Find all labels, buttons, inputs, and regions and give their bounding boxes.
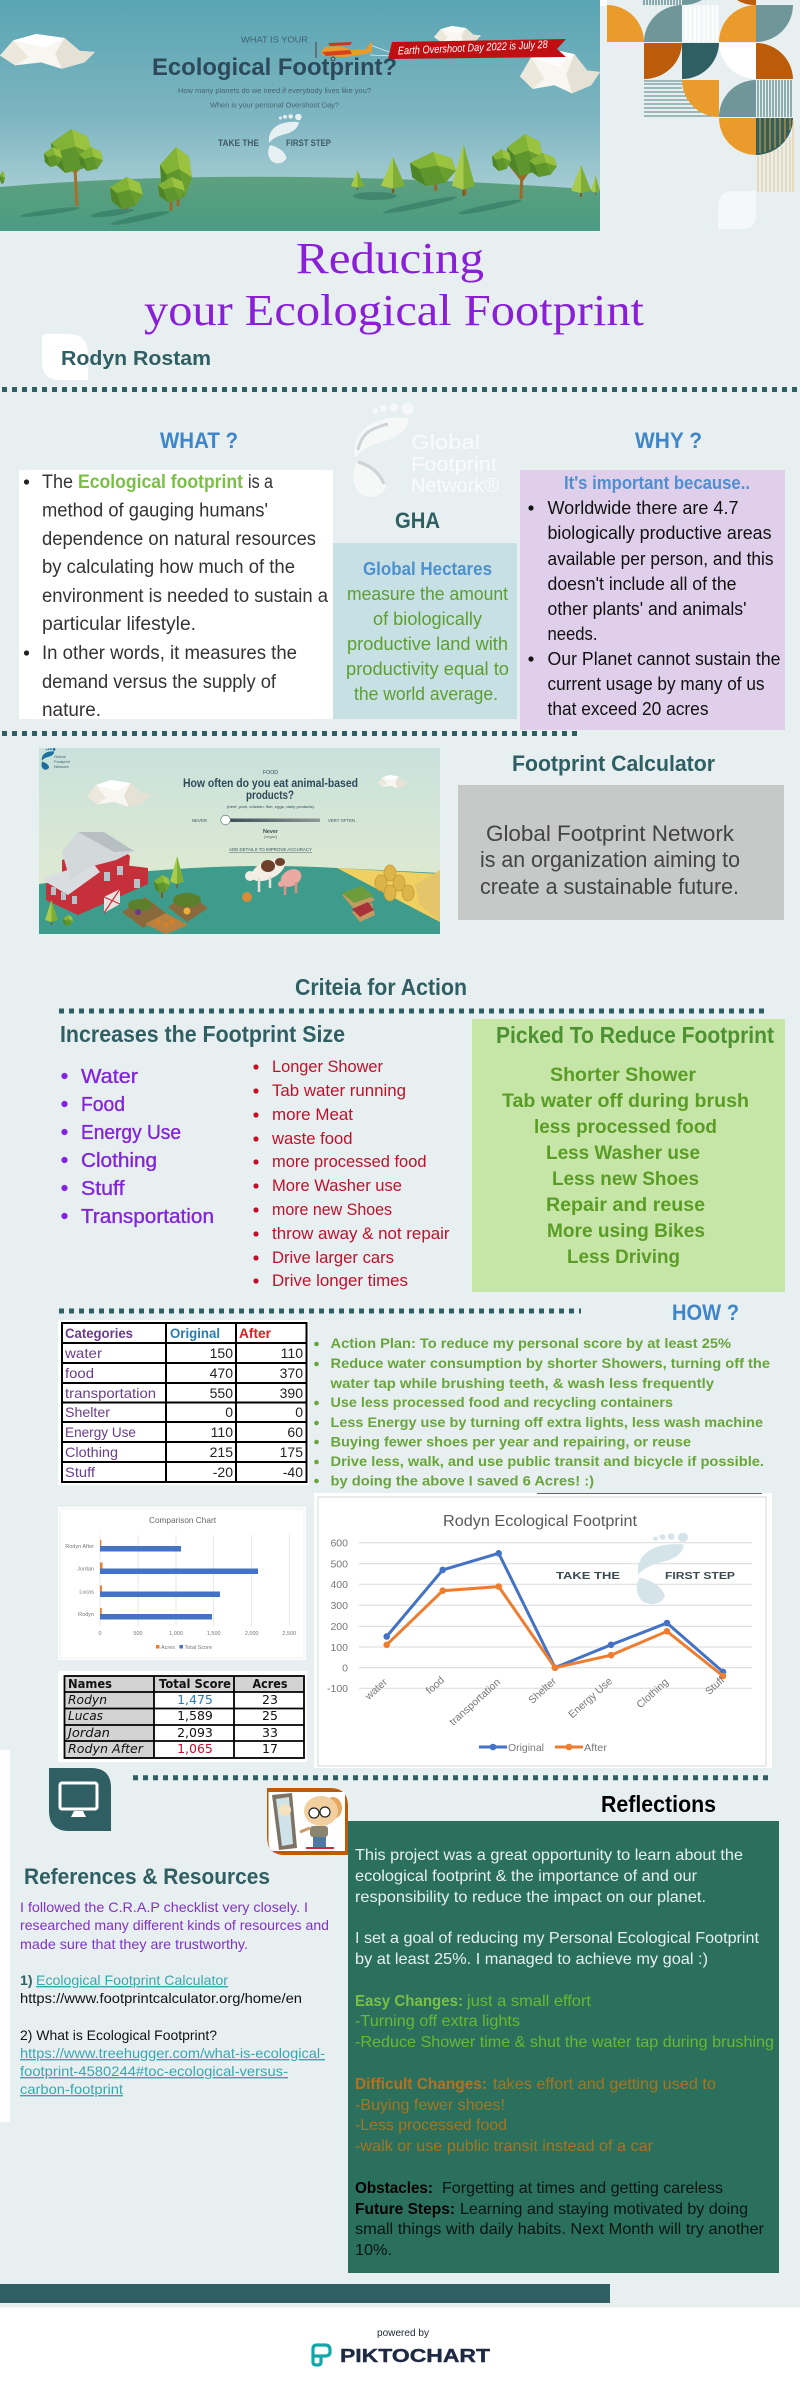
panel: picked to reduce footprint: Less new Shoes: [552, 1168, 699, 1190]
panel: global hectares: [333, 543, 517, 719]
line chart: rodyn ecological footprint: 0: [342, 1662, 348, 1674]
crates: [342, 886, 375, 922]
slider: NEVER: [192, 818, 208, 823]
list: habits increasing the footprint: Drive longer times: [272, 1271, 408, 1290]
calculator screenshot: [39, 748, 440, 934]
bar chart: comparison chart: [58, 1507, 306, 1660]
text block: references: [20, 1899, 329, 2097]
panel: why it matters: doesn't include all of the: [548, 574, 736, 594]
action plan list: [314, 1335, 770, 1488]
reflection summary: This project was a great opportunity to learn about the: [355, 1847, 743, 1864]
title: Reducing: [296, 234, 484, 283]
difficult changes: -Buying fewer shoes!: [355, 2097, 505, 2114]
hero heading text: How many planets do we need if everybody lives like you?: [178, 86, 371, 95]
slider: Never: [263, 829, 278, 835]
obstacles and future steps: [355, 2180, 765, 2259]
panel: picked to reduce footprint: [472, 1019, 785, 1292]
panel: picked to reduce footprint: Less Driving: [567, 1246, 680, 1268]
legend: Acres: [161, 1645, 175, 1651]
panel: picked to reduce footprint: less processed food: [534, 1116, 717, 1138]
panel: global footprint network: is an organization aiming to: [480, 847, 740, 872]
bar chart: comparison chart: 0: [98, 1631, 102, 1637]
panel: global hectares: productivity equal to: [346, 659, 509, 679]
panel: picked to reduce footprint: Tab water off during brush: [502, 1090, 749, 1112]
table: score comparison: 23: [262, 1692, 278, 1707]
action plan list: Use less processed food and recycling containers: [330, 1394, 673, 1410]
table: category scores: Categories: [65, 1325, 133, 1341]
category labels: water: [362, 1676, 390, 1703]
legend: After: [584, 1742, 608, 1754]
panel: why it matters: that exceed 20 acres: [548, 699, 708, 719]
difficult changes: Difficult Changes:: [355, 2076, 487, 2093]
hero heading text: [152, 34, 397, 110]
footer bar: [0, 2284, 610, 2303]
low-poly trees: [0, 129, 600, 227]
table: category scores: Clothing: [65, 1444, 118, 1460]
barn: [43, 832, 148, 915]
text block: references: I followed the C.R.A.P checklist very closely. I: [20, 1899, 308, 1915]
reflection summary: [355, 1847, 760, 1968]
list: footprint categories: Transportation: [81, 1206, 214, 1228]
text block: references: footprint-4580244#toc-ecological-versus-: [20, 2063, 288, 2079]
hill: [0, 177, 600, 231]
heading: what: WHAT ?: [160, 428, 238, 453]
panel: global hectares: of biologically: [373, 609, 482, 629]
table: category scores: 215: [210, 1444, 233, 1460]
line: original: [383, 1550, 726, 1675]
bar chart: comparison chart: Comparison Chart: [149, 1515, 217, 1525]
heading: criteria for action: Criteia for Action: [295, 974, 467, 1000]
list: footprint categories: Clothing: [81, 1150, 157, 1172]
table: category scores: 0: [225, 1404, 233, 1420]
list: habits increasing the footprint: Drive larger cars: [272, 1248, 394, 1267]
table: category scores: Energy Use: [65, 1424, 136, 1440]
list: habits increasing the footprint: more Meat: [272, 1105, 353, 1124]
line chart: rodyn ecological footprint: Rodyn Ecological Footprint: [443, 1513, 638, 1530]
watermark: take the first step: TAKE THE: [556, 1570, 620, 1582]
icon: piktochart logo: [313, 2345, 330, 2365]
table: category scores: Stuff: [65, 1464, 95, 1480]
panel: global hectares: Global Hectares: [363, 559, 492, 579]
action plan list: Drive less, walk, and use public transit and bicycle if possible.: [330, 1453, 764, 1469]
watermark: take the first step: [556, 1533, 735, 1604]
question text: [183, 770, 358, 809]
easy changes: just a small effort: [466, 1993, 592, 2010]
obstacles and future steps: Future Steps:: [355, 2201, 455, 2218]
line chart: rodyn ecological footprint: 600: [330, 1538, 348, 1550]
panel: why it matters: Worldwide there are 4.7: [548, 498, 738, 518]
list: footprint categories: Food: [81, 1094, 125, 1116]
table: score comparison: Acres: [252, 1676, 288, 1691]
slider: VERY OFTEN: [328, 818, 355, 823]
network logo: Network: [54, 764, 69, 769]
heading: footprint calculator: Footprint Calculator: [512, 751, 715, 776]
panel: what definition: dependence on natural resources: [42, 529, 316, 550]
list: habits increasing the footprint: more new Shoes: [272, 1200, 392, 1219]
table: category scores: 0: [295, 1404, 303, 1420]
logo: global footprint network watermark: [353, 403, 499, 497]
table: category scores: 550: [210, 1385, 233, 1401]
panel: why it matters: current usage by many of us: [548, 674, 764, 694]
table: category scores: water: [64, 1345, 102, 1361]
list: footprint categories: Stuff: [81, 1178, 125, 1200]
trees: [45, 856, 184, 926]
table: category scores: Original: [170, 1325, 220, 1341]
panel: picked to reduce footprint: Shorter Shower: [550, 1064, 696, 1086]
bar chart: comparison chart: 2,500: [282, 1631, 296, 1637]
piktochart branding: PIKTOCHART: [340, 2345, 491, 2366]
bar chart: comparison chart: Jordan: [77, 1566, 94, 1572]
bar chart: comparison chart: 2,000: [245, 1631, 259, 1637]
legend: Total Score: [184, 1645, 212, 1651]
line chart: rodyn ecological footprint: -100: [327, 1683, 348, 1695]
list: habits increasing the footprint: Longer Shower: [272, 1057, 383, 1076]
panel: why it matters: other plants' and animals': [548, 599, 746, 619]
panel: what definition: particular lifestyle.: [42, 614, 196, 635]
legend: Original: [508, 1742, 544, 1754]
panel: reflections: [348, 1821, 779, 2273]
table: score comparison: Names: [68, 1676, 112, 1691]
heading: references and resources: References & Resources: [24, 1864, 270, 1889]
text block: references: made sure that they are trustworthy.: [20, 1936, 248, 1952]
table: category scores: 150: [210, 1345, 233, 1361]
category labels: [362, 1674, 727, 1728]
farm animals: [242, 854, 305, 902]
question text: products?: [246, 788, 294, 802]
bar chart: comparison chart: 1,000: [169, 1631, 183, 1637]
author name: [42, 334, 211, 380]
take the first step logo: TAKE THE: [218, 138, 259, 149]
table: score comparison: Rodyn: [68, 1692, 107, 1707]
legend: [156, 1645, 212, 1651]
table: category scores: transportation: [65, 1385, 156, 1401]
question text: (beef, pork, chicken, fish, eggs, dairy products): [227, 804, 315, 809]
category labels: transportation: [447, 1676, 503, 1728]
panel: global footprint network: create a sustainable future.: [480, 874, 739, 899]
plane and tow banner: Earth Overshoot Day 2022 is July 28: [398, 39, 549, 57]
network logo: [41, 748, 71, 770]
hero banner image: [0, 0, 600, 231]
panel: picked to reduce footprint: Less Washer use: [546, 1142, 700, 1164]
table: score comparison: Jordan: [65, 1725, 110, 1740]
panel: global footprint network: Global Footprint Network: [486, 821, 735, 846]
table: score comparison: Rodyn After: [68, 1741, 144, 1756]
clouds: [87, 775, 408, 807]
heading: why: WHY ?: [635, 428, 702, 453]
table: category scores: 175: [280, 1444, 303, 1460]
panel: why it matters: [520, 470, 785, 730]
piktochart branding: [313, 2327, 491, 2366]
list: footprint categories: Energy Use: [81, 1122, 181, 1144]
panel: what definition: Ecological footprint: [78, 472, 244, 493]
title: [144, 234, 644, 335]
table: score comparison: Total Score: [159, 1676, 231, 1691]
hero heading text: WHAT IS YOUR: [241, 34, 308, 44]
reflection summary: by at least 25%. I managed to achieve my goal :): [355, 1951, 708, 1968]
panel: picked to reduce footprint: More using Bikes: [547, 1220, 705, 1242]
table: score comparison: 2,093: [177, 1725, 213, 1740]
list: habits increasing the footprint: More Washer use: [272, 1176, 402, 1195]
obstacles and future steps: Forgetting at times and getting careless: [442, 2180, 723, 2197]
panel: what definition: In other words, it measures the: [42, 643, 297, 664]
icon: mirror cartoon: [267, 1788, 348, 1855]
table: score comparison: 1,475: [177, 1692, 213, 1707]
table: category scores: -40: [283, 1464, 303, 1480]
difficult changes: -Less processed food: [355, 2117, 507, 2134]
hay bales: [375, 865, 414, 901]
bar chart: comparison chart: 500: [133, 1631, 143, 1637]
line: after: [383, 1583, 726, 1679]
table: category scores: 470: [210, 1365, 233, 1381]
table: score comparison: 25: [262, 1708, 278, 1723]
network logo: Footprint: [54, 759, 71, 764]
panel: why it matters: biologically productive areas: [548, 523, 772, 543]
table: category scores: 110: [211, 1424, 233, 1440]
reflection summary: responsibility to reduce the impact on our planet.: [355, 1889, 706, 1906]
category labels: Energy Use: [566, 1675, 615, 1721]
obstacles and future steps: Learning and staying motivated by doing: [460, 2201, 748, 2218]
difficult changes: [355, 2076, 716, 2155]
vegetable beds: [122, 893, 208, 934]
logo: global footprint network watermark: Footprint: [411, 454, 497, 476]
bar chart: comparison chart: 1,500: [207, 1631, 221, 1637]
action plan list: Less Energy use by turning off extra lights, less wash machine: [330, 1414, 763, 1430]
table: category scores: After: [239, 1325, 272, 1341]
panel: global hectares: measure the amount: [347, 584, 508, 604]
network logo: Global: [54, 754, 66, 759]
reflection summary: ecological footprint & the importance of and our: [355, 1868, 698, 1885]
heading: reflections: Reflections: [601, 1791, 716, 1817]
text block: references: carbon-footprint: [20, 2081, 123, 2097]
panel: what definition: The: [42, 472, 73, 493]
panel: what definition: demand versus the supply of: [42, 672, 277, 693]
table: category scores: [58, 1320, 309, 1485]
watermark: take the first step: FIRST STEP: [665, 1570, 735, 1582]
action plan list: by doing the above I saved 6 Acres! :): [330, 1472, 594, 1488]
text block: references: Ecological Footprint Calculator: [36, 1972, 228, 1988]
panel: why it matters: needs.: [548, 624, 598, 644]
panel: why it matters: Our Planet cannot sustain the: [548, 649, 780, 669]
table: score comparison: 17: [262, 1741, 278, 1756]
bars: [100, 1540, 258, 1620]
text block: references: https://www.footprintcalculator.org/home/en: [20, 1990, 302, 2006]
category labels: Clothing: [634, 1676, 671, 1711]
table: category scores: 370: [280, 1365, 303, 1381]
slider: ADD DETAILS TO IMPROVE ACCURACY: [229, 847, 312, 852]
table: category scores: 110: [281, 1345, 303, 1361]
list: habits increasing the footprint: waste food: [271, 1129, 352, 1148]
heading: how: HOW ?: [672, 1300, 739, 1325]
obstacles and future steps: Obstacles:: [355, 2180, 433, 2197]
action plan list: Action Plan: To reduce my personal score by at least 25%: [330, 1335, 732, 1351]
panel: what definition: method of gauging humans': [42, 501, 268, 522]
panel: why it matters: available per person, and this: [548, 549, 774, 569]
easy changes: Easy Changes:: [355, 1993, 463, 2010]
clouds: [0, 26, 600, 93]
table: category scores: 390: [280, 1385, 303, 1401]
list: footprint categories: Water: [81, 1066, 138, 1088]
line chart: rodyn ecological footprint: 400: [330, 1579, 348, 1591]
logo: global footprint network watermark: Global: [411, 432, 480, 454]
text block: references: 1): [20, 1972, 32, 1988]
bar chart: comparison chart: Rodyn: [78, 1612, 94, 1618]
logo: global footprint network watermark: Network®: [411, 475, 499, 497]
author name: Rodyn Rostam: [61, 348, 211, 370]
line chart: rodyn ecological footprint: 300: [330, 1600, 348, 1612]
table: category scores: 60: [287, 1424, 303, 1440]
legend: [479, 1742, 608, 1754]
reflection summary: I set a goal of reducing my Personal Ecological Footprint: [355, 1930, 760, 1947]
panel: what definition: nature.: [42, 700, 101, 721]
piktochart branding: powered by: [377, 2327, 430, 2339]
slider: [192, 815, 355, 852]
panel: what definition: is a: [248, 472, 273, 493]
list: habits increasing the footprint: Tab water running: [272, 1081, 406, 1100]
text block: references: https://www.treehugger.com/what-is-ecological-: [20, 2045, 325, 2061]
list: footprint categories: [62, 1066, 214, 1228]
slider: (vegan): [264, 834, 278, 839]
panel: what definition: by calculating how much of the: [42, 557, 295, 578]
action plan list: Reduce water consumption by shorter Showers, turning off the: [330, 1355, 770, 1371]
category labels: Stuff: [703, 1674, 727, 1698]
difficult changes: -walk or use public transit instead of a car: [355, 2138, 654, 2155]
bar chart: comparison chart: Rodyn After: [65, 1544, 94, 1550]
hero heading text: Ecological Footprint?: [152, 54, 397, 81]
difficult changes: takes effort and getting used to: [493, 2076, 716, 2093]
panel: picked to reduce footprint: Repair and reuse: [546, 1194, 705, 1216]
heading: increases the footprint size: Increases the Footprint Size: [60, 1021, 345, 1047]
panel: what definition: environment is needed to sustain a: [42, 586, 328, 607]
panel: picked to reduce footprint: Picked To Reduce Footprint: [496, 1022, 774, 1048]
easy changes: [355, 1993, 774, 2051]
panel: global hectares: the world average.: [354, 684, 498, 704]
easy changes: -Turning off extra lights: [355, 2013, 520, 2030]
obstacles and future steps: small things with daily habits. Next Month will try another: [355, 2221, 765, 2238]
table: category scores: Shelter: [65, 1404, 110, 1420]
question text: How often do you eat animal-based: [183, 776, 358, 790]
take the first step logo: [218, 114, 332, 163]
bar chart: comparison chart: Lucas: [79, 1590, 94, 1596]
text block: references: researched many different kinds of resources and: [20, 1917, 329, 1933]
action plan list: water tap while brushing teeth, & wash less frequently: [329, 1375, 714, 1391]
obstacles and future steps: 10%.: [355, 2242, 392, 2259]
easy changes: -Reduce Shower time & shut the water tap during brushing: [355, 2034, 774, 2051]
question text: FOOD: [263, 770, 278, 776]
list: habits increasing the footprint: more processed food: [272, 1152, 426, 1171]
panel: why it matters: It's important because..: [564, 473, 750, 493]
list: habits increasing the footprint: [253, 1057, 450, 1290]
action plan list: Buying fewer shoes per year and repairing, or reuse: [330, 1434, 691, 1450]
category labels: Shelter: [526, 1675, 559, 1706]
icon: computer monitor: [49, 1768, 111, 1831]
table: score comparison: 33: [262, 1725, 278, 1740]
line chart: rodyn ecological footprint: [314, 1493, 772, 1768]
hero heading text: When is your personal Overshoot Day?: [210, 100, 339, 110]
text block: references: 2) What is Ecological Footprint?: [20, 2027, 217, 2043]
line chart: rodyn ecological footprint: 100: [330, 1642, 348, 1654]
panel: what definition: [19, 470, 333, 721]
category labels: food: [424, 1674, 447, 1697]
heading: gha: GHA: [395, 508, 440, 533]
table: score comparison: 1,589: [177, 1708, 213, 1723]
list: habits increasing the footprint: throw away & not repair: [272, 1224, 450, 1243]
decorative geometric pattern: [600, 0, 793, 229]
table: category scores: -20: [213, 1464, 233, 1480]
table: score comparison: 1,065: [177, 1741, 213, 1756]
table: score comparison: Lucas: [68, 1708, 103, 1723]
take the first step logo: FIRST STEP: [286, 138, 332, 149]
title: your Ecological Footprint: [144, 286, 644, 335]
line chart: rodyn ecological footprint: 200: [330, 1621, 348, 1633]
line chart: rodyn ecological footprint: 500: [330, 1558, 348, 1570]
table: score comparison: [58, 1671, 307, 1762]
plane and tow banner: [316, 39, 566, 61]
panel: global hectares: productive land with: [347, 634, 508, 654]
panel: global footprint network: [458, 785, 784, 920]
table: category scores: food: [65, 1365, 94, 1381]
